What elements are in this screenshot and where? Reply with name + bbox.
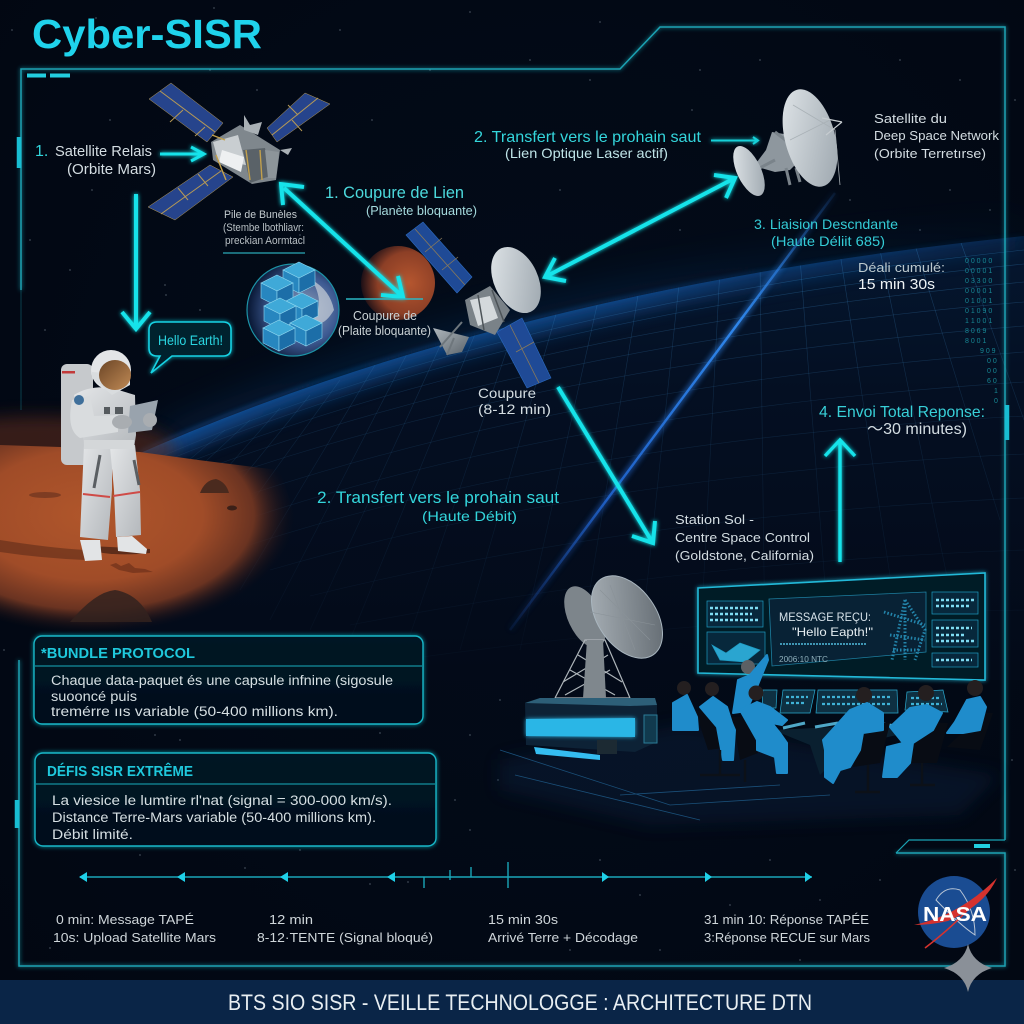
icon: NASA logo: NASA — [923, 904, 987, 926]
arrow: label to satellite — [160, 147, 204, 161]
label: transfert haut débit: 2. Transfert vers le prohain saut — [317, 488, 559, 507]
icon: deep space network satellite — [727, 83, 847, 201]
binary data stream: 8 0 6 9 — [965, 328, 987, 335]
label: coupure de plaite: Coupure de — [353, 308, 417, 323]
blue data beam — [510, 193, 835, 630]
operator 5 — [883, 685, 942, 777]
Mars rocks — [0, 479, 237, 622]
label: station sol: Centre Space Control — [675, 530, 810, 545]
operator 1 — [673, 681, 698, 730]
label: satellite relais: Satellite Relais — [55, 143, 152, 160]
binary data stream: 0 0 — [987, 358, 997, 365]
label: deep space network: (Orbite Terretırse) — [874, 146, 986, 161]
operator 3 — [740, 686, 787, 773]
label: liaison descendante: (Haute Déliit 685) — [771, 233, 885, 249]
planet horizon glow — [160, 236, 1024, 448]
double arrow: transit to DSN — [545, 175, 735, 281]
bundle protocol body — [51, 673, 393, 719]
label: envoi total — [819, 404, 985, 438]
icon: earth with data bundles — [247, 262, 339, 356]
chair legs — [700, 750, 935, 792]
arrow: transit to ground station — [558, 387, 655, 543]
label: transfert optique — [474, 129, 702, 161]
label: deep space network — [874, 111, 1000, 161]
timeline label: 12 min: 8-12·TENTE (Signal bloqué) — [257, 930, 433, 945]
icon: planet mars — [361, 246, 435, 320]
title: Cyber-SISR — [32, 11, 262, 57]
label: coupure de lien — [325, 183, 477, 218]
icon: ground station antenna — [525, 563, 677, 760]
timeline label: 31 min 10: 31 min 10: Réponse TAPÉE — [704, 912, 869, 927]
timeline label: 0 min: 10s: Upload Satellite Mars — [53, 930, 217, 945]
défis body: Distance Terre-Mars variable (50-400 millions km). — [52, 810, 376, 825]
binary data stream: 0 0 0 0 0 — [965, 258, 992, 265]
icon: relay satellite — [148, 83, 330, 220]
label: transfert optique: (Lien Optique Laser actif) — [505, 145, 668, 161]
panel: bundle protocol — [34, 636, 423, 724]
footer bar — [0, 980, 1024, 1024]
floor lines — [500, 750, 830, 820]
binary data stream: 0 0 — [987, 368, 997, 375]
label: station sol: (Goldstone, California) — [675, 548, 814, 563]
binary data stream: 1 1 0 0 1 — [965, 318, 992, 325]
binary data stream: 0 3 3 0 0 — [965, 278, 992, 285]
label: coupure de lien: 1. Coupure de Lien — [325, 183, 464, 202]
binary data stream: 8 0 0 1 — [965, 338, 987, 345]
label: transfert haut débit: (Haute Débit) — [422, 508, 517, 524]
icon: NASA logo — [914, 876, 997, 948]
binary data stream: 6 0 — [987, 378, 997, 385]
frame side tabs — [17, 137, 1007, 828]
heading: défis SISR: DÉFIS SISR EXTRÊME — [47, 762, 193, 780]
arrow: up to envoi total — [825, 440, 855, 562]
label: liaison descendante: 3. Liaision Descndante — [754, 216, 898, 232]
label: deep space network: Deep Space Network — [874, 128, 1000, 143]
timeline label: 31 min 10: 3:Réponse RECUE sur Mars — [704, 930, 870, 945]
timeline label: 15 min 30s — [488, 912, 638, 945]
timeline label: 12 min — [257, 912, 433, 945]
binary data stream: 0 1 0 0 1 — [965, 298, 992, 305]
left data panels — [707, 592, 978, 667]
boots — [80, 540, 102, 561]
icon: astronaut — [61, 350, 158, 561]
label: transfert optique: 2. Transfert vers le prohain saut — [474, 129, 702, 146]
label: station sol: Station Sol - — [675, 512, 754, 527]
footer text: BTS SIO SISR - VEILLE TECHNOLOGGE : ARCHITECTURE DTN — [228, 990, 812, 1015]
frame lower notch — [896, 840, 1005, 853]
perspective grid — [130, 240, 1024, 660]
backpack — [61, 364, 93, 465]
binary data stream: 1 — [994, 388, 998, 395]
label: coupure de plaite — [338, 299, 431, 338]
torso — [74, 387, 136, 448]
défis body: Débit limité. — [52, 827, 133, 842]
label: satellite relais — [35, 143, 156, 178]
operator 4 — [823, 687, 883, 783]
timeline label: 0 min: 0 min: Message TAPÉ — [56, 912, 194, 927]
timeline label: 15 min 30s: 15 min 30s — [488, 912, 559, 927]
binary data stream — [965, 258, 998, 405]
message panel — [769, 592, 926, 666]
bundle protocol body: suooncé puis — [51, 689, 137, 704]
panel: défis SISR — [35, 753, 436, 846]
speech bubble — [149, 322, 231, 373]
Mars ground — [0, 445, 340, 650]
label: délai cumulé: 15 min 30s — [858, 276, 935, 293]
bundle protocol body: tremérre ııs variable (50-400 millions km). — [51, 704, 338, 719]
label: station sol — [675, 512, 814, 563]
operator 2 — [700, 682, 735, 760]
helmet — [91, 350, 131, 390]
label: envoi total: 4. Envoi Total Reponse: — [819, 404, 985, 421]
message panel: "Hello Eapth!" — [792, 625, 873, 639]
label: transfert haut débit — [317, 488, 559, 524]
double arrow: satellite to mars — [281, 184, 403, 297]
surface inner glow — [120, 236, 1024, 462]
label: pile de bundles: Pile de Bunèles — [224, 209, 297, 221]
tablet — [128, 400, 158, 433]
icon: transit satellite — [406, 222, 551, 388]
binary data stream: 0 1 0 9 0 — [965, 308, 992, 315]
horizon line — [140, 236, 1024, 452]
arrow: label to DSN — [711, 137, 758, 144]
label: satellite relais: 1. — [35, 143, 48, 160]
binary data stream: 9 0 9 — [980, 348, 996, 355]
timeline label: 31 min 10 — [704, 912, 870, 945]
label: liaison descendante — [754, 216, 898, 249]
planet surface — [120, 236, 1024, 680]
binary data stream: 0 0 0 0 1 — [965, 288, 992, 295]
défis body: La viesice le lumtire rl'nat (signal = 300-000 km/s). — [52, 793, 392, 808]
operator standing — [733, 655, 768, 713]
chairs — [695, 710, 993, 767]
label: coupure duration — [478, 385, 551, 417]
data noise — [710, 600, 974, 660]
label: envoi total: ～30 minutes) — [867, 421, 967, 438]
label: coupure de plaite: (Plaite bloquante) — [338, 323, 431, 338]
label: coupure de lien: (Planète bloquante) — [366, 203, 477, 218]
label: deep space network: Satellite du — [874, 111, 947, 126]
control room wall screen — [698, 573, 985, 680]
binary data stream: 0 0 0 0 1 — [965, 268, 992, 275]
message panel: MESSAGE REÇU: — [779, 610, 871, 624]
label: délai cumulé: Déali cumulé: — [858, 260, 945, 275]
bundle protocol body: Chaque data-paquet és une capsule infnine (sigosule — [51, 673, 393, 688]
label: pile de bundles: (Stembe lbothliavr: — [223, 222, 304, 234]
label: coupure duration: Coupure — [478, 385, 536, 401]
timeline label: 0 min — [53, 912, 217, 945]
frame tick marks — [27, 76, 990, 846]
binary data stream: 0 — [994, 398, 998, 405]
arrow: down to astronaut — [122, 194, 150, 329]
Mars haze — [0, 416, 175, 480]
speech bubble: Hello Earth! — [158, 332, 223, 348]
label: pile de bundles — [223, 209, 305, 253]
operator 6 — [947, 680, 986, 733]
label: pile de bundles: preckian Aormtacl — [225, 235, 305, 247]
control room consoles — [762, 690, 948, 775]
timeline label: 12 min: 12 min — [269, 912, 313, 927]
icon: sparkle — [944, 944, 992, 992]
label: délai cumulé — [858, 260, 945, 293]
timeline — [79, 862, 812, 888]
label: satellite relais: (Orbite Mars) — [67, 161, 156, 178]
ground station floor — [500, 725, 1000, 825]
frame dim left segment — [20, 290, 22, 410]
message panel: 2006:10 NTC — [779, 654, 828, 664]
line: downlink — [829, 250, 831, 393]
label: coupure duration: (8-12 min) — [478, 401, 551, 417]
défis body — [52, 793, 392, 842]
operators — [673, 655, 993, 792]
timeline label: 15 min 30s: Arrivé Terre + Décodage — [488, 930, 638, 945]
heading: bundle protocol: *BUNDLE PROTOCOL — [41, 646, 195, 662]
legs — [80, 445, 112, 540]
